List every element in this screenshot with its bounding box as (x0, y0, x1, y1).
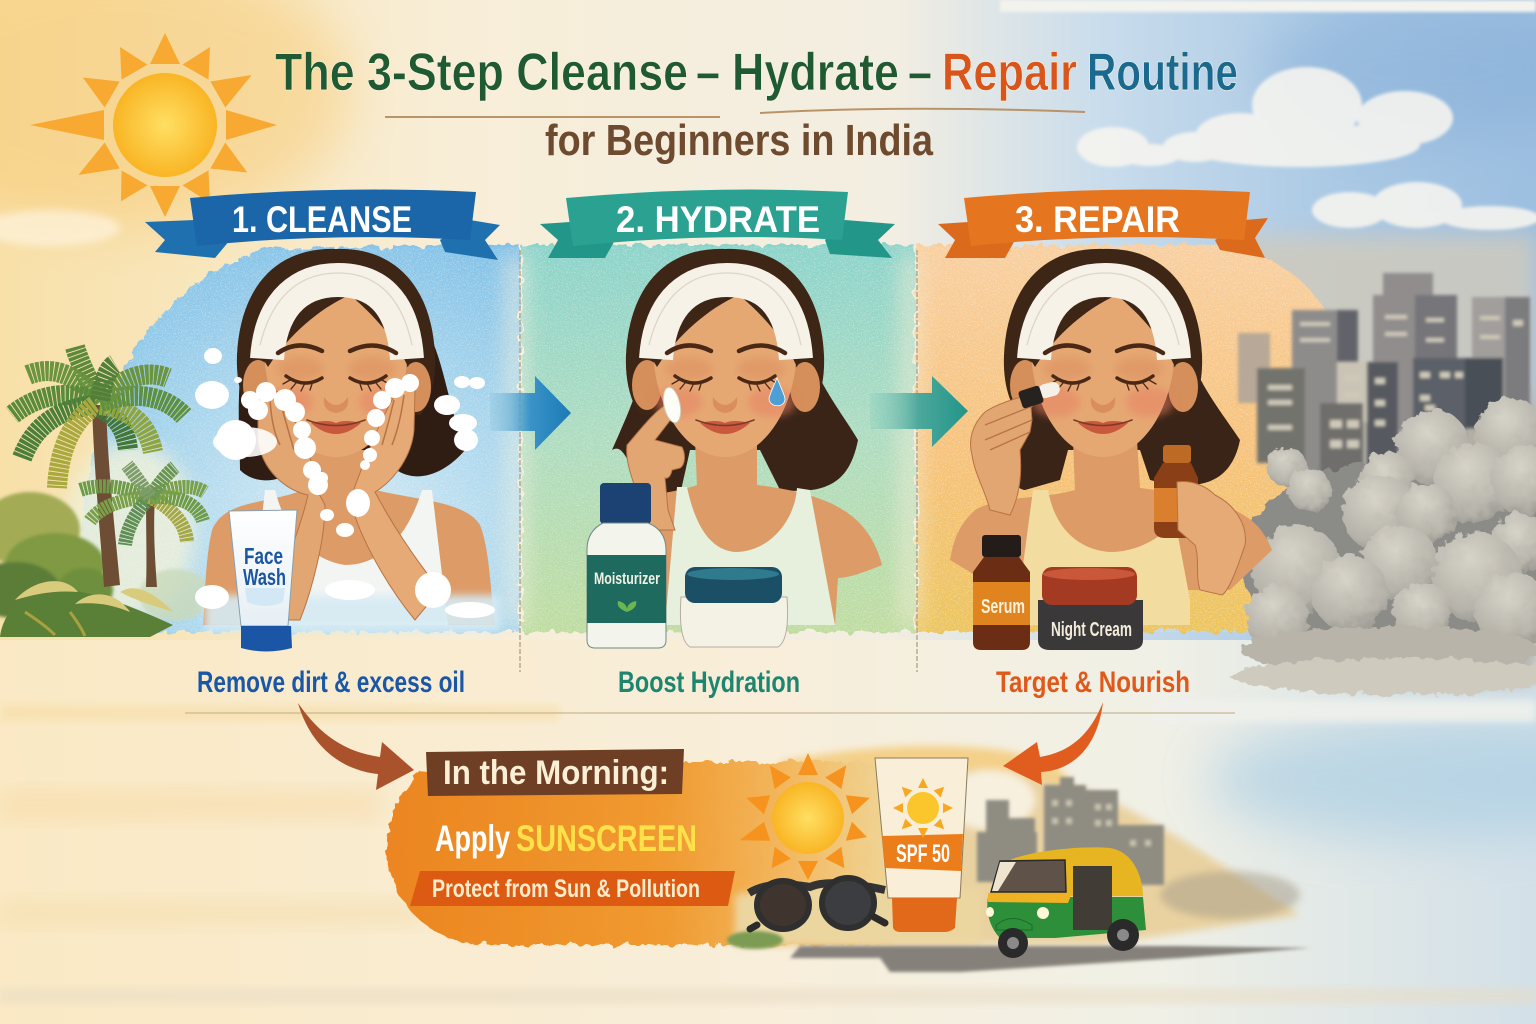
title (275, 43, 1238, 102)
arrow: cleanse to morning (298, 703, 414, 790)
morning orange pill (387, 762, 890, 945)
apply sunscreen: Apply (435, 818, 510, 859)
panel: cleanse background (70, 245, 520, 632)
label: repair: Target & Nourish (996, 666, 1190, 699)
title: – (696, 43, 720, 102)
woman 2 with cotton pad (612, 249, 882, 625)
dropper (1018, 380, 1061, 409)
woman 1 cleansing (195, 249, 500, 631)
amber bottle in hand (1154, 445, 1245, 595)
banner: cleanse: 1. CLEANSE (232, 199, 412, 240)
banner: repair: 3. REPAIR (1015, 199, 1180, 240)
city skyline right (1238, 273, 1530, 480)
banner: repair (938, 190, 1268, 258)
water drop (769, 378, 785, 406)
speckle texture (60, 240, 1360, 635)
title: Routine (1087, 43, 1238, 102)
title: The 3-Step Cleanse (275, 43, 688, 102)
clouds top right (1077, 67, 1536, 230)
apply sunscreen (435, 818, 697, 859)
bushes left (0, 492, 211, 637)
protect ribbon (410, 871, 735, 906)
woman 3 applying serum (950, 249, 1272, 625)
in the morning label: In the Morning: (443, 754, 669, 792)
title: Hydrate (732, 43, 899, 102)
panel: repair background (917, 245, 1360, 632)
sunscreen tube: SPF 50 (896, 840, 950, 868)
protect ribbon: Protect from Sun & Pollution (432, 875, 700, 903)
face wash tube (229, 510, 297, 652)
arrow: repair to morning (1003, 702, 1103, 785)
night cream jar: Night Cream (1051, 619, 1132, 641)
night cream jar (1038, 567, 1143, 650)
tube sun disc (907, 792, 939, 824)
sunscreen tube (875, 758, 968, 932)
arrow: cleanse to hydrate (490, 376, 571, 450)
banner: hydrate (540, 190, 895, 258)
sun top left (30, 33, 277, 217)
hand with cotton pad (627, 402, 684, 530)
banner: hydrate: 2. HYDRATE (616, 199, 820, 240)
left hand and arm (258, 390, 325, 620)
label: hydrate: Boost Hydration (618, 666, 800, 699)
palm trees (12, 347, 205, 587)
title: Repair (942, 43, 1077, 102)
serum bottle (973, 535, 1030, 650)
moisturizer bottle: Moisturizer (594, 569, 660, 588)
label: cleanse: Remove dirt & excess oil (197, 666, 465, 699)
panel: hydrate background (522, 245, 915, 632)
right hand and arm (350, 388, 440, 620)
smog clouds (1230, 398, 1536, 694)
dividers (185, 250, 1235, 713)
moisturizer bottle (587, 483, 666, 648)
foam on face (195, 348, 495, 618)
sunglasses (749, 878, 885, 929)
title underline (385, 109, 1085, 117)
road (790, 946, 1310, 972)
green tuft (727, 931, 783, 949)
moisturizer jar (680, 567, 788, 647)
ground under products (735, 886, 980, 945)
hill behind products (770, 746, 1300, 945)
arrow: hydrate to repair (870, 376, 968, 447)
apply sunscreen: SUNSCREEN (516, 818, 697, 859)
small sun (736, 753, 873, 880)
title: – (908, 43, 932, 102)
panel fades (65, 255, 922, 625)
subtitle: for Beginners in India (545, 116, 933, 165)
banner: cleanse (145, 190, 500, 260)
small city (977, 777, 1164, 885)
face wash tube: Face (244, 543, 283, 569)
serum bottle: Serum (981, 596, 1025, 618)
left hand (971, 395, 1032, 515)
face wash tube: Wash (243, 564, 286, 590)
auto rickshaw (986, 847, 1146, 958)
